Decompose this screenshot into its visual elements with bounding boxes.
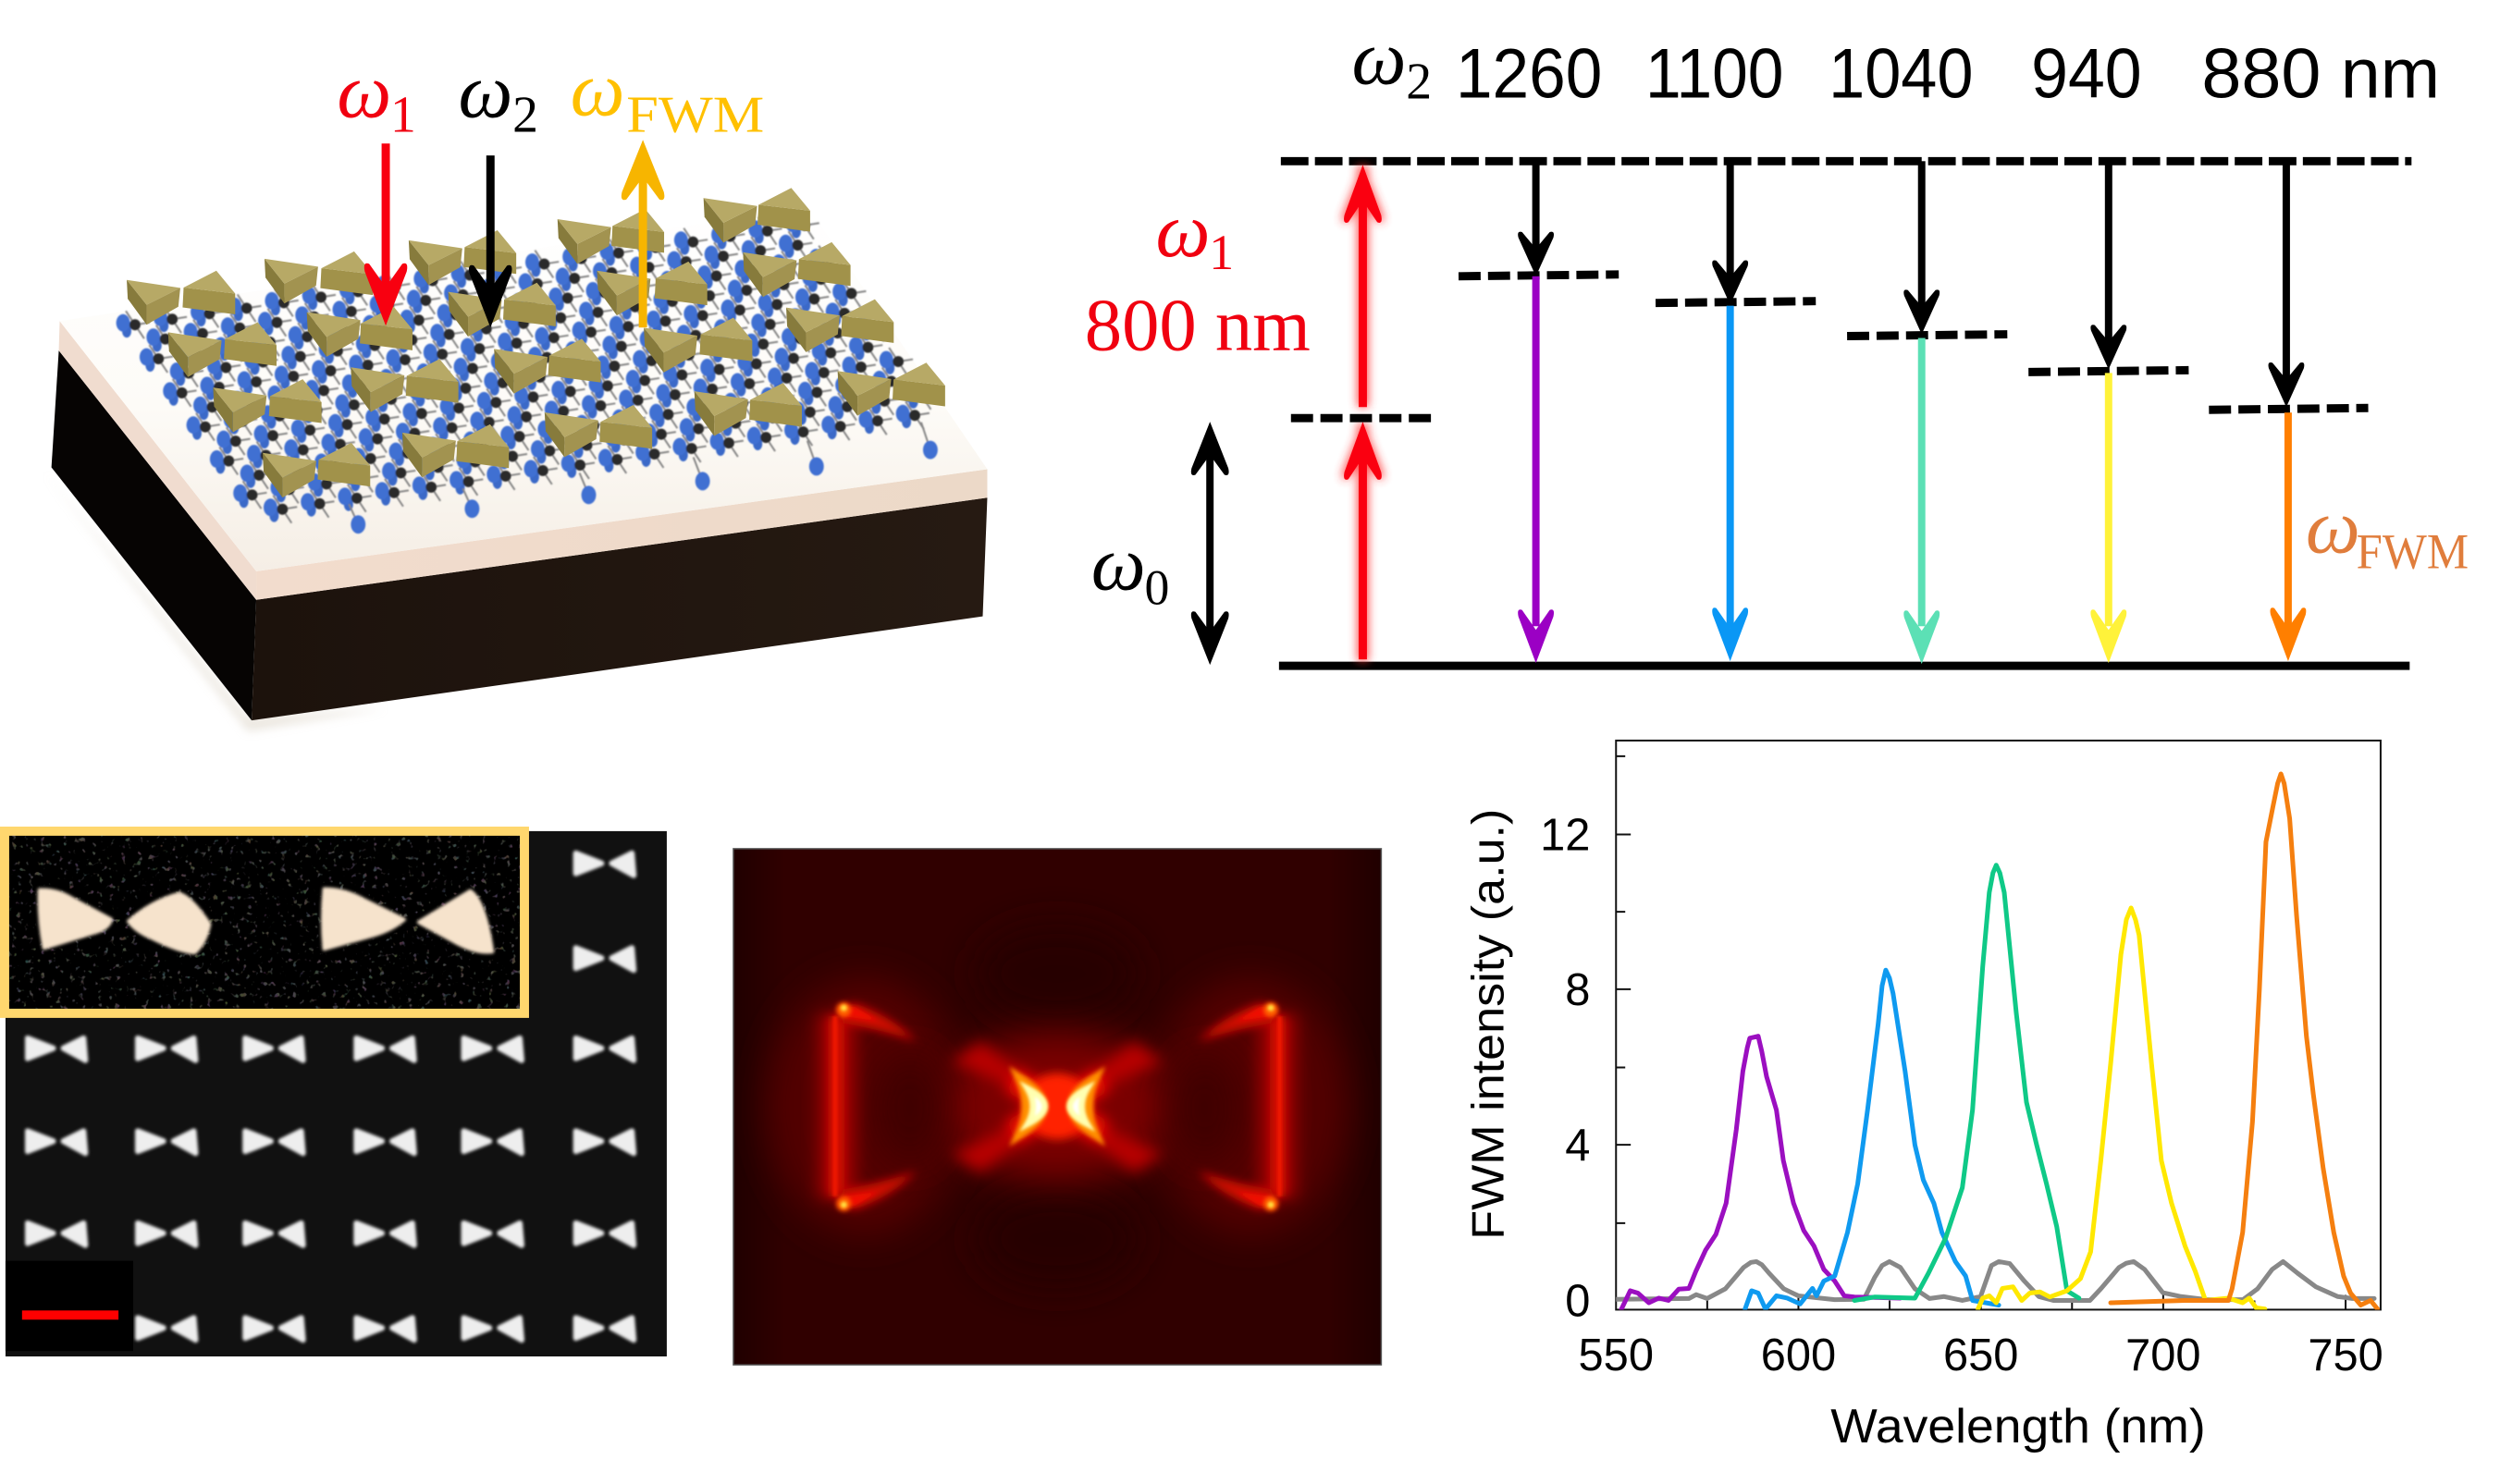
label: omega FWM (571, 47, 764, 143)
MoS2 lattice (117, 212, 938, 534)
scale bar (6, 1261, 133, 1351)
label: omega 2 (459, 49, 538, 143)
arrow: omega 1 incident (364, 143, 407, 325)
panel: simulated field enhancement map (733, 849, 1381, 1365)
y axis tick labels: 12 (1540, 810, 1590, 860)
curve: gray reference (1616, 1261, 2374, 1300)
curve: blue (1745, 970, 1999, 1309)
transition column 1260 nm (1459, 161, 1619, 663)
ground state line (1279, 662, 2409, 670)
SEM background (6, 831, 667, 1356)
label: omega FWM: ω (2306, 484, 2360, 570)
y axis title: FWM intensity (a.u.) (1464, 809, 1514, 1240)
curve: orange (2111, 774, 2378, 1309)
label: omega 1 800 nm: 1 (1209, 225, 1234, 280)
transition column 1100 nm (1656, 161, 1816, 661)
label: omega FWM: FWM (2357, 524, 2469, 580)
field hot spots (768, 924, 1348, 1290)
x axis title: Wavelength (nm) (1830, 1399, 2206, 1453)
bowtie grid (28, 853, 634, 1340)
label: omega 0: ω (1091, 521, 1146, 607)
x axis tick labels: 550 (1579, 1331, 1654, 1380)
curve: green (1854, 865, 2079, 1300)
label: omega FWM: FWM (626, 86, 764, 143)
intermediate dashed level (1291, 414, 1438, 423)
zoomed inset with gold frame (5, 831, 524, 1013)
y axis tick labels: 8 (1565, 965, 1590, 1015)
top labels: omega 2 wavelengths: 940 (2031, 35, 2142, 114)
x axis tick labels (1579, 1331, 2383, 1380)
y axis tick labels (1540, 810, 1590, 1326)
transition column 1040 nm (1847, 161, 2007, 664)
label: omega 1: ω (337, 49, 391, 134)
top labels: omega 2 wavelengths: 1040 (1829, 35, 1973, 114)
label: omega 1 (337, 49, 416, 143)
label: omega 1 800 nm: ω (1155, 188, 1210, 274)
top labels: omega 2 wavelengths: 1100 (1645, 35, 1783, 114)
transition column 940 nm (2028, 161, 2188, 663)
x axis tick labels: 750 (2308, 1331, 2383, 1380)
label: omega 0 (1091, 521, 1169, 615)
axis ticks (1616, 756, 2346, 1309)
panel: 3D device schematic (44, 47, 987, 731)
arrow: omega 2 incident (469, 155, 511, 327)
label: omega 2: ω (459, 49, 512, 134)
curve: yellow (1978, 908, 2265, 1309)
label: omega 2: 2 (512, 86, 538, 143)
x axis tick labels: 650 (1943, 1331, 2018, 1380)
label: omega FWM (2306, 484, 2469, 580)
substrate block (44, 207, 987, 731)
y axis tick labels: 4 (1565, 1121, 1590, 1171)
red pump arrows with glow (1342, 165, 1384, 661)
panel: FWM spectra chart (1464, 741, 2383, 1453)
x axis tick labels: 700 (2125, 1331, 2201, 1380)
transition column 880 nm (2209, 161, 2369, 661)
x axis tick labels: 600 (1761, 1331, 1836, 1380)
panel: energy level diagram (1085, 16, 2469, 670)
virtual level: top dashed line (1281, 157, 2411, 166)
plot frame (1616, 741, 2381, 1309)
gold bowtie nanoantenna array (127, 188, 945, 497)
heat map background (733, 849, 1381, 1365)
arrow: omega FWM emitted (622, 140, 664, 327)
top labels: omega 2 wavelengths (1352, 16, 2440, 114)
label: omega 0: 0 (1145, 559, 1169, 615)
top labels: omega 2 wavelengths: ω (1352, 16, 1407, 102)
label: omega 1 800 nm (1085, 188, 1311, 366)
label: omega FWM: ω (571, 47, 625, 132)
panel: SEM image of bowtie array (5, 831, 667, 1356)
label: omega 1: 1 (390, 86, 416, 143)
top labels: omega 2 wavelengths: 880 nm (2201, 35, 2440, 114)
top labels: omega 2 wavelengths: 2 (1406, 54, 1432, 111)
omega 0 double arrow (1191, 422, 1229, 665)
top labels: omega 2 wavelengths: 1260 (1456, 35, 1602, 114)
label: omega 1 800 nm: 800 nm (1085, 284, 1311, 366)
curve: purple (1621, 1036, 1901, 1309)
y axis tick labels: 0 (1565, 1276, 1590, 1326)
